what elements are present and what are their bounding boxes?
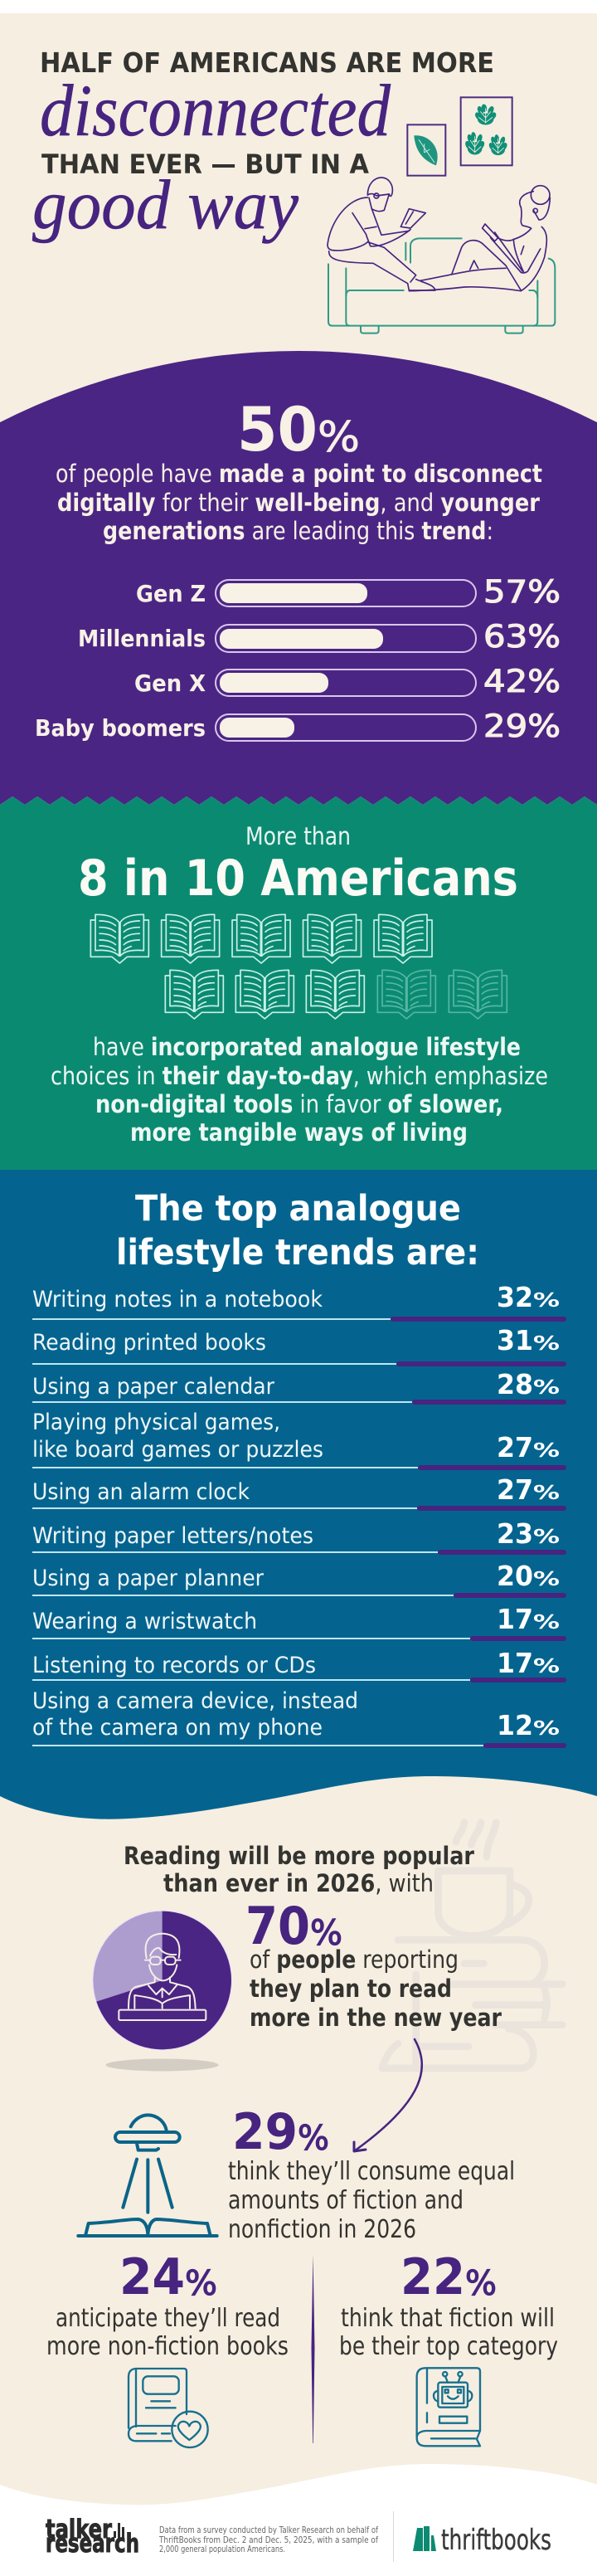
text block: reading in 2026 intro: Reading will be more popular [124,1842,475,1870]
bar: Gen X 42%: 42% [483,664,561,699]
text block: 24% description [46,2304,289,2361]
icon: ufo beaming over open book [78,2115,217,2236]
row: Listening to records or CDs 17%: % [533,1656,560,1678]
text: survey source note [158,2525,378,2554]
text: survey source note: 2,000 general population Americans. [159,2544,285,2554]
icon: sofa [328,238,555,334]
row: Using a paper planner 20%: 20 [497,1560,533,1592]
title [32,46,494,244]
row: Using a camera device 12%: % [533,1718,560,1740]
icon: book with robot [417,2368,480,2446]
text block: 70% description [250,1945,502,2032]
title: disconnected [40,71,391,152]
bar: Millennials 63% [78,619,561,655]
stat: 70% [245,1896,502,2032]
row: Using an alarm clock 27%: % [533,1483,560,1504]
row: Listening to records or CDs 17% [32,1647,564,1680]
text block: analogue lifestyle description: have incorporated analogue lifestyle [93,1033,521,1061]
stat: 24% [46,2248,289,2361]
row: Wearing a wristwatch 17%: 17 [497,1603,533,1635]
row: Using a camera device 12%: of the camera on my phone [32,1715,323,1741]
chart: 70% pie with reader icon [92,1910,232,2051]
row: Playing physical games 27%: 27 [497,1431,533,1463]
heading: top analogue trends: lifestyle trends are: [116,1232,479,1273]
panel: teal 8 in 10 section [0,796,597,1171]
pie shadow [106,2059,219,2071]
text block: 24% description: anticipate they’ll read [56,2304,280,2333]
text block: 50% description: digitally for their well-being, and younger [57,489,541,517]
bar: Gen Z 57%: 57% [483,574,561,610]
row: Using an alarm clock 27%: 27 [497,1473,533,1506]
title: good way [32,166,298,244]
row: Writing notes in a notebook 32%: Writing notes in a notebook [32,1287,323,1312]
row: Wearing a wristwatch 17%: Wearing a wristwatch [32,1609,257,1634]
footer [46,2511,551,2562]
big stat: 50%: % [318,413,360,461]
stat: 22% [339,2248,558,2361]
text block: 22% description: think that fiction will [341,2304,555,2333]
big stat: 50%: 50 [237,395,318,465]
logo: talker research [46,2515,139,2559]
panel: purple 50% section [0,351,597,805]
row: Playing physical games 27%: like board games or puzzles [32,1437,323,1463]
row: Listening to records or CDs 17%: 17 [497,1647,533,1679]
row: Writing paper letters/notes 23%: Writing paper letters/notes [32,1523,313,1549]
row: Using a paper calendar 28%: Using a paper calendar [32,1374,275,1400]
logo: thriftbooks [413,2524,551,2557]
text block: 70% description: more in the new year [250,2004,502,2032]
text block: 29% description: amounts of fiction and [228,2186,464,2215]
row: Using a camera device 12%: 12 [497,1709,533,1741]
text: survey source note: Data from a survey conducted by Talker Research on behalf of [159,2525,378,2535]
illustration: couple reading on a sofa with wall art [328,97,555,334]
heading: top analogue trends: The top analogue [135,1188,461,1230]
icon: wall picture with three leaves [461,97,512,165]
text block: 50% description: generations are leading this trend: [103,517,493,545]
big stat: 50% [237,395,360,465]
stat: 29%: % [298,2118,329,2158]
text block: analogue lifestyle description: more tangible ways of living [130,1118,468,1147]
row: Using a camera device 12%: Using a camera device, instead [32,1688,358,1714]
text block: 22% description: be their top category [339,2332,558,2361]
text block: analogue lifestyle description: non-digital tools in favor of slower, [95,1090,503,1118]
heading: top analogue trends [116,1188,479,1273]
row: Wearing a wristwatch 17%: % [533,1612,560,1634]
row: Using a paper planner 20%: % [533,1569,560,1590]
stat: 24%: 24 [119,2248,185,2306]
row: Using a paper calendar 28%: 28 [497,1368,533,1400]
stat: 24%: % [185,2263,217,2303]
row: Wearing a wristwatch 17% [32,1603,564,1639]
logo: thriftbooks: thriftbooks [441,2524,551,2557]
icon: watermark coffee cup on book stack [382,1823,562,2068]
icon: book with heart [129,2369,208,2447]
bar: Gen X 42% [134,664,561,699]
row: Reading printed books 31%: 31 [497,1324,533,1356]
text block: 29% description: nonfiction in 2026 [228,2215,416,2244]
text block: 29% description: think they’ll consume equal [228,2157,515,2186]
bar: Baby boomers 29% [35,709,561,744]
icon: woman reading [409,186,550,291]
row: Playing physical games 27%: % [533,1440,560,1462]
heading: 8 in 10 Americans: 8 in 10 Americans [78,850,518,908]
row: Using an alarm clock 27%: Using an alarm clock [32,1479,250,1505]
text: More than: More than [245,822,351,850]
text block: 70% description: they plan to read [250,1975,452,2003]
title: HALF OF AMERICANS ARE MORE [40,46,494,79]
row: Using a paper calendar 28% [32,1368,564,1402]
list: trends [32,1281,564,1746]
logo: talker research: research [46,2529,139,2559]
bar: Gen Z 57%: Gen Z [136,580,206,607]
text block: 50% description [56,460,542,545]
row: Writing notes in a notebook 32% [32,1281,564,1319]
text block: 50% description: of people have made a point to disconnect [56,460,542,488]
bar: Millennials 63%: Millennials [78,625,206,652]
row: Playing physical games 27%: Playing physical games, [32,1410,280,1435]
text: survey source note: ThriftBooks from Dec. 2 and Dec. 5, 2025, with a sample of [158,2535,378,2545]
text block: analogue lifestyle description: choices in their day-to-day, which emphasize [51,1062,548,1090]
row: Writing paper letters/notes 23%: % [533,1527,560,1548]
row: Writing notes in a notebook 32%: 32 [497,1281,533,1313]
icon: man reading [328,178,435,290]
row: Writing notes in a notebook 32%: % [533,1290,560,1312]
row: Writing paper letters/notes 23%: 23 [497,1517,533,1550]
bar: Millennials 63%: 63% [483,619,561,655]
logo: talker research: talker [46,2515,113,2544]
stat: 22%: % [465,2263,497,2303]
stat: 22%: 22 [400,2248,465,2306]
icon row: 8 of 10 books highlighted [90,914,507,1019]
row: Reading printed books 31%: % [533,1333,560,1355]
row: Using a paper planner 20%: Using a paper planner [32,1566,265,1591]
bar: Gen X 42%: Gen X [134,670,206,697]
text block: 22% description [339,2304,558,2361]
row: Reading printed books 31% [32,1324,564,1364]
stat: 29%: 29 [232,2103,298,2161]
row: Using an alarm clock 27% [32,1473,564,1508]
stat: 70%: 70 [245,1896,310,1956]
bar: Gen Z 57% [136,574,561,610]
arrow: from 70% to 29% [354,2039,422,2151]
icon: wall picture with single leaf [407,124,445,176]
row: Using a camera device 12% [32,1688,564,1746]
title: THAN EVER — BUT IN A [41,149,369,180]
text block: 24% description: more non-fiction books [46,2332,289,2361]
icon: person reading at desk [119,1934,206,2020]
text block: reading in 2026 intro [124,1842,475,1897]
row: Playing physical games 27% [32,1410,564,1468]
row: Writing paper letters/notes 23% [32,1517,564,1552]
bar: Baby boomers 29%: Baby boomers [35,714,206,742]
text block: analogue lifestyle description [51,1033,548,1147]
panel: blue top analogue trends section [0,1170,597,1819]
stat: 29% [228,2103,515,2244]
row: Listening to records or CDs 17%: Listening to records or CDs [32,1653,316,1678]
stat: 70%: % [310,1912,342,1953]
bar chart: generations [35,574,561,744]
row: Using a paper planner 20% [32,1560,564,1595]
bar: Baby boomers 29%: 29% [483,709,561,744]
text block: 29% description [228,2157,515,2244]
text block: 70% description: of people reporting [250,1945,459,1974]
column divider [312,2255,315,2443]
row: Reading printed books 31%: Reading printed books [32,1330,266,1356]
text block: reading in 2026 intro: than ever in 2026, with [163,1869,434,1897]
row: Using a paper calendar 28%: % [533,1377,560,1399]
